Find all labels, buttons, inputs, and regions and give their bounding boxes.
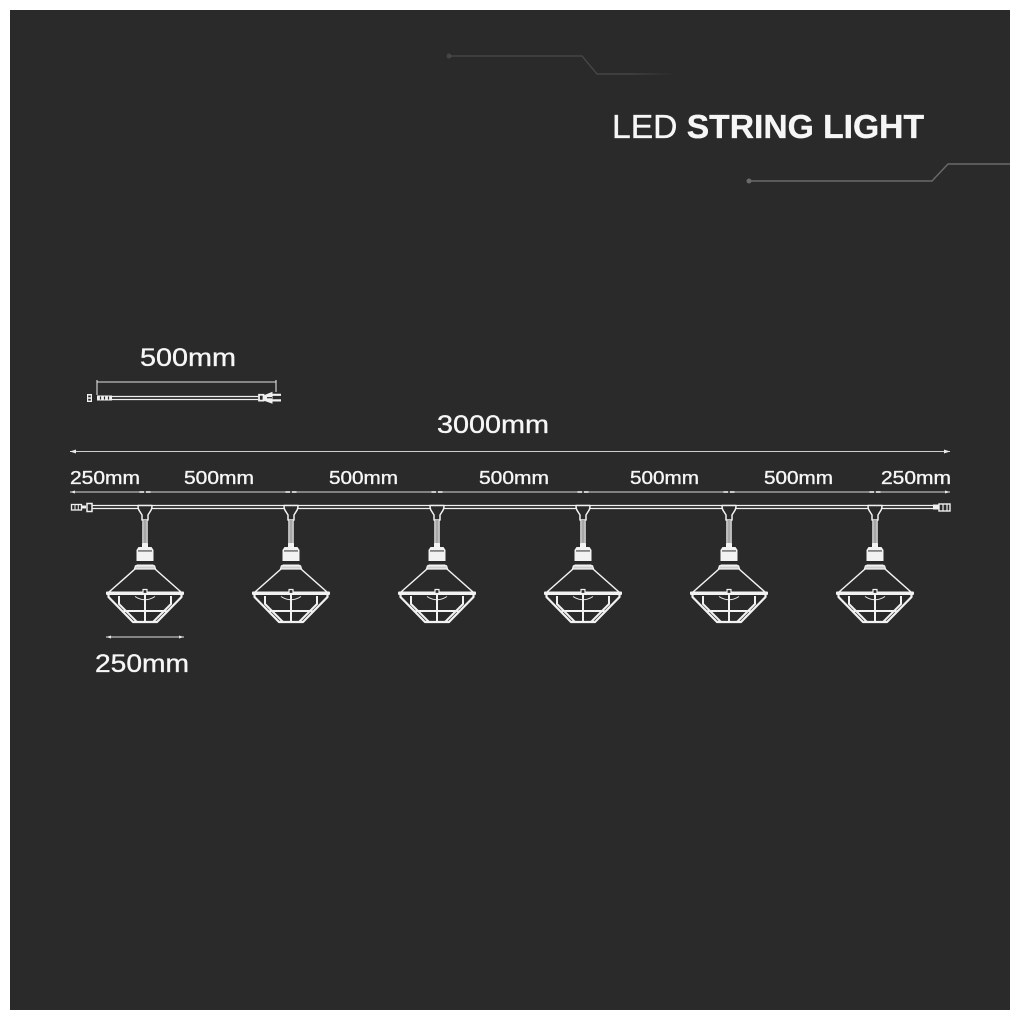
dimension arrow: lamp diameter [106, 636, 184, 638]
lamp 2 [252, 506, 330, 622]
dimension line: total length [70, 450, 950, 454]
segment labels [70, 467, 951, 488]
segment labels: 250mm [881, 467, 951, 488]
segment labels: 500mm [479, 467, 549, 488]
segment labels: 500mm [630, 467, 699, 488]
label: total length 3000mm: 3000mm [437, 411, 549, 439]
lamp 5 [690, 506, 768, 622]
power cable with connectors [87, 392, 281, 403]
segment labels: 500mm [329, 467, 398, 488]
segment labels: 250mm [70, 467, 140, 488]
label: power cable length 500mm: 500mm [140, 344, 236, 372]
end connector: left [72, 504, 92, 512]
lamp 1 [106, 506, 184, 622]
end connector: right [933, 504, 950, 511]
lamp 3 [398, 506, 476, 622]
lamp 6 [836, 506, 914, 622]
dimension line: power cable [97, 380, 276, 395]
decorative circuit line: right [746, 164, 1010, 184]
main cable [92, 506, 934, 508]
label: lamp diameter 250mm: 250mm [95, 650, 189, 678]
segment labels: 500mm [184, 467, 254, 488]
lamp 4 [544, 506, 622, 622]
segment dimension line [70, 490, 950, 494]
decorative circuit line: top [446, 54, 675, 74]
segment labels: 500mm [764, 467, 833, 488]
title: LED STRING LIGHT [612, 108, 924, 145]
